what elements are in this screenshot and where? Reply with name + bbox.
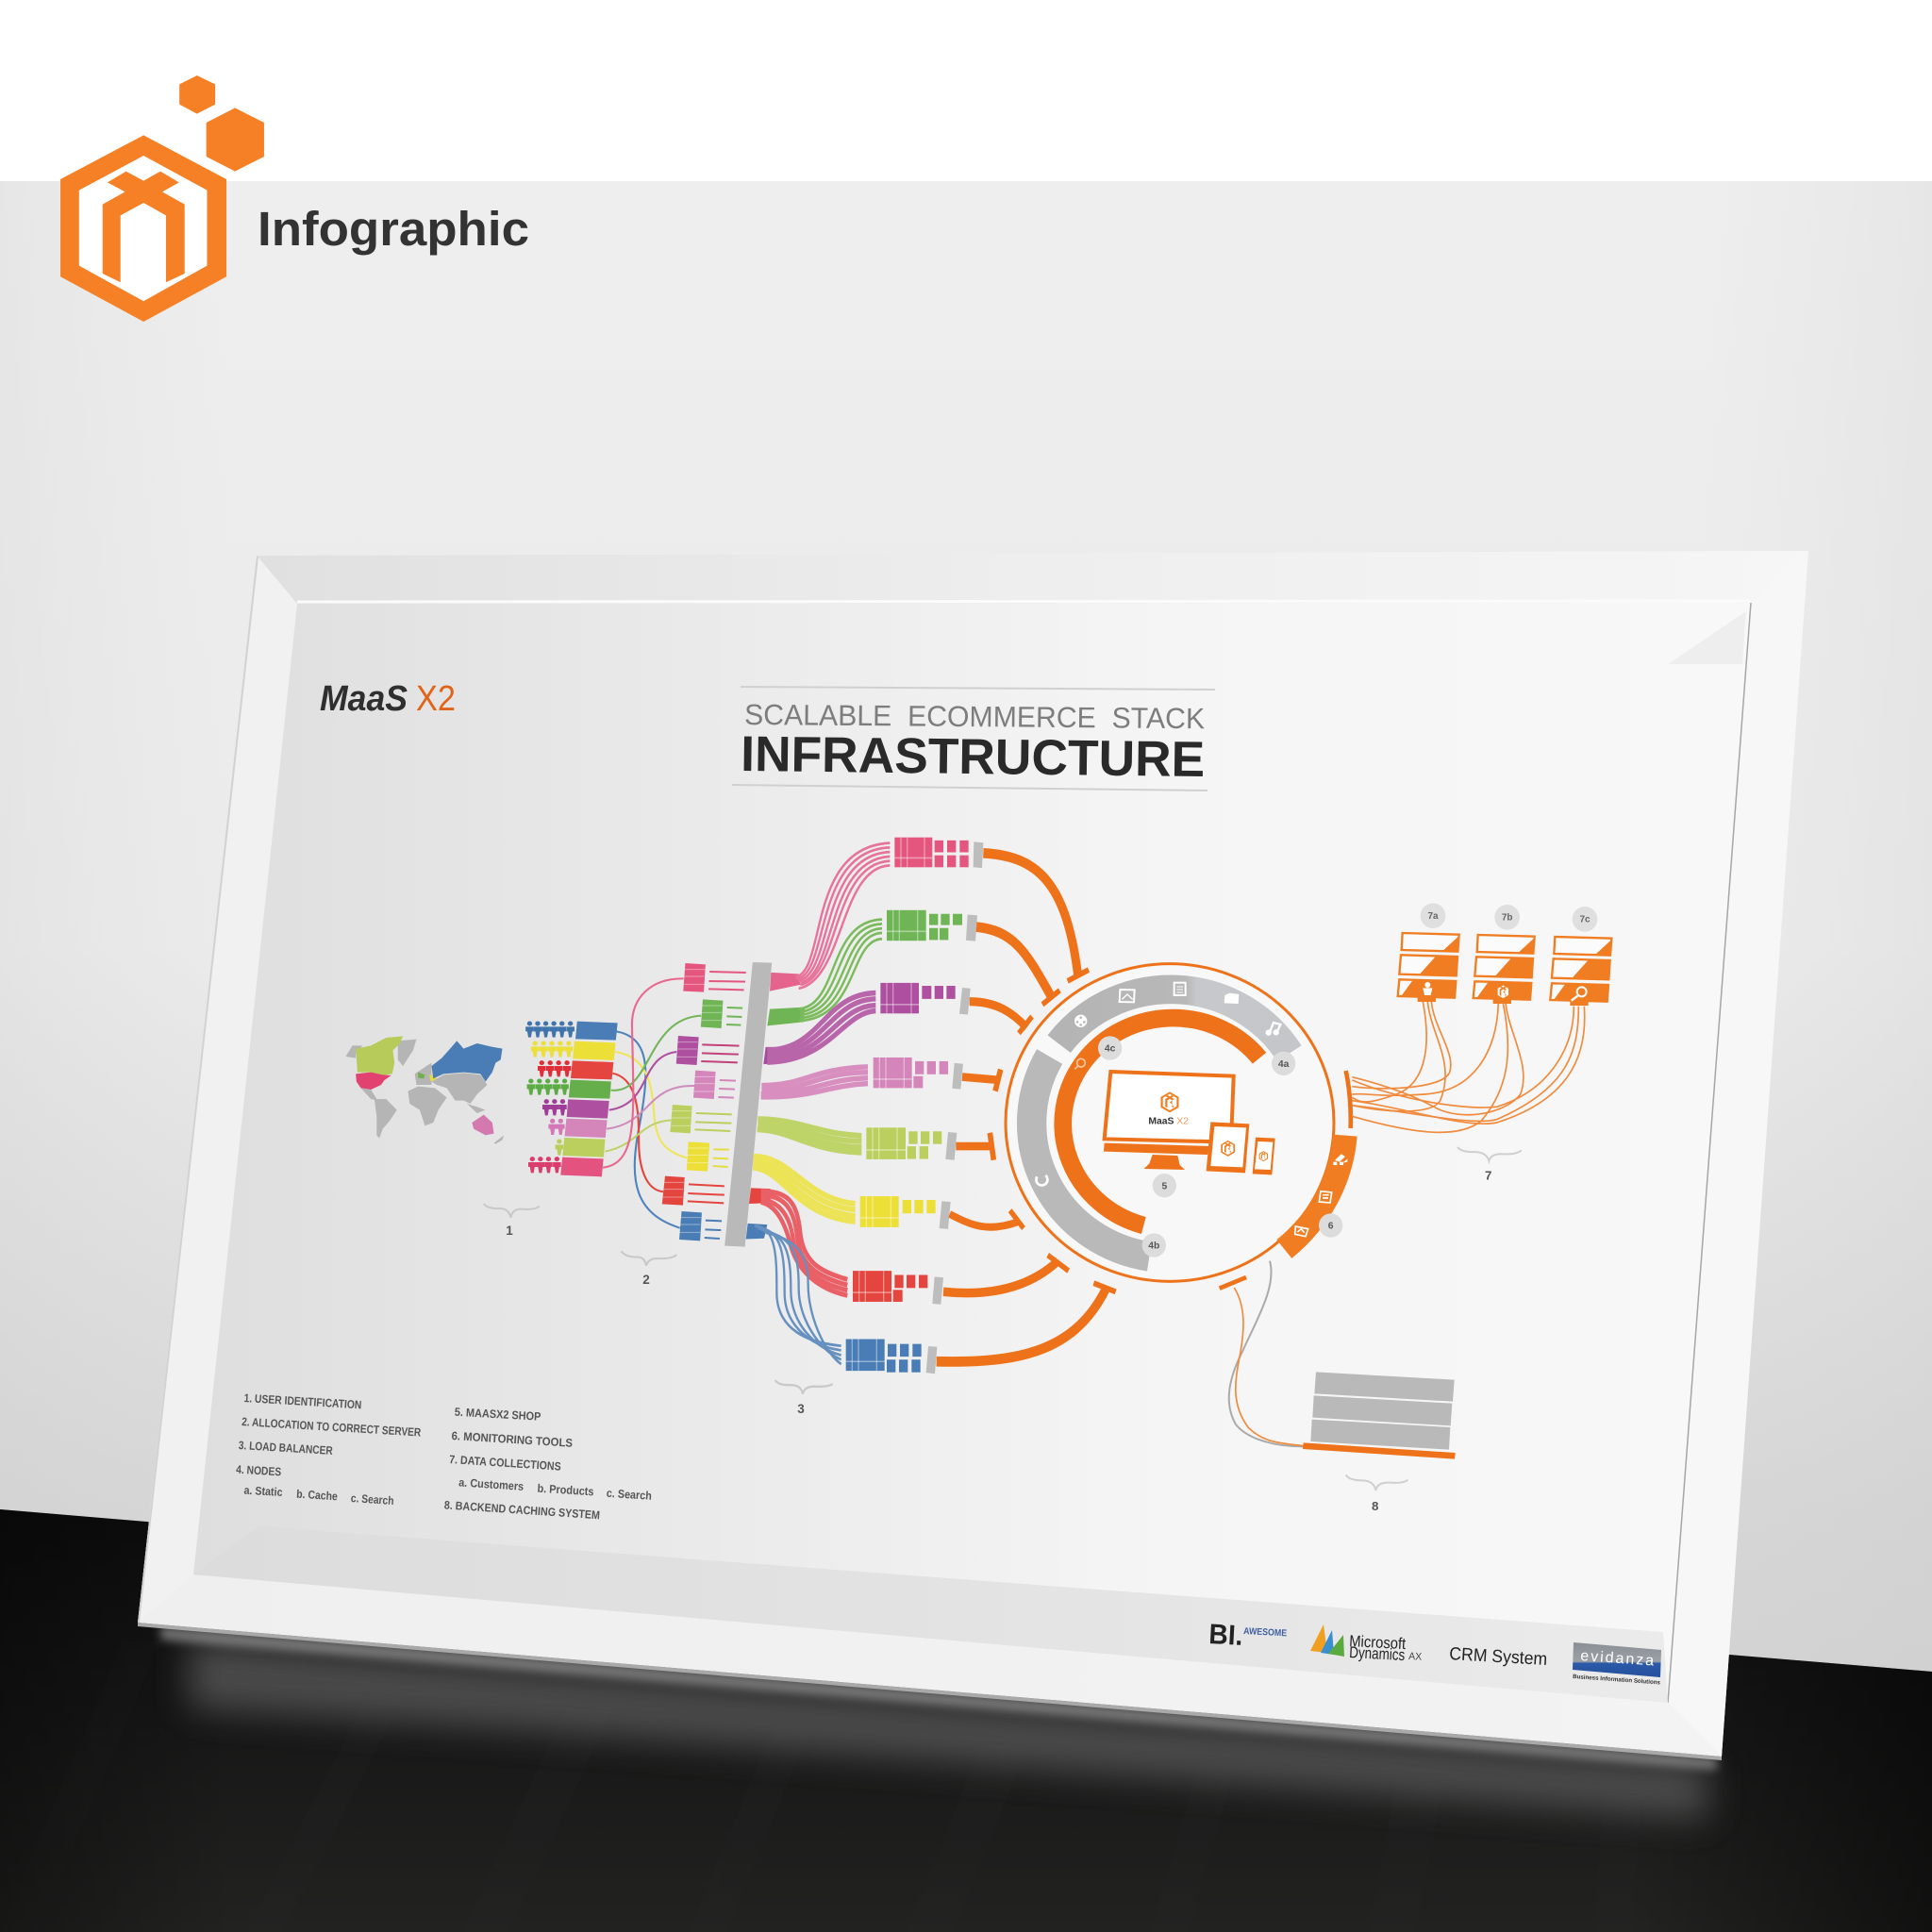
badge 5: 5 — [1161, 1181, 1167, 1191]
cache blocks — [1310, 1372, 1455, 1450]
legend: 6. MONITORING TOOLS — [451, 1429, 573, 1450]
icon: film — [1074, 1015, 1087, 1027]
footer logo: Microsoft Dynamics: Dynamics — [1349, 1643, 1406, 1664]
monitor logo — [1160, 1091, 1179, 1112]
brace 8 — [1346, 1474, 1407, 1491]
badge 6 — [1319, 1213, 1342, 1238]
badge 4a — [1272, 1052, 1295, 1075]
icon: refresh — [1036, 1175, 1047, 1186]
badge 7c — [1573, 907, 1597, 932]
footer logo: CRM System: CRM System — [1449, 1644, 1548, 1670]
icon: gift mark — [103, 172, 185, 282]
collection 7b — [1474, 935, 1535, 1004]
legend: 1. USER IDENTIFICATION — [243, 1391, 362, 1411]
step 7: data collections — [1346, 903, 1611, 1183]
legend: 2. ALLOCATION TO CORRECT SERVER — [242, 1415, 422, 1440]
flow: red — [749, 1188, 847, 1295]
collection wires — [1352, 1002, 1585, 1132]
badge 7a — [1421, 903, 1445, 928]
brace 1 — [484, 1204, 540, 1218]
connector: red — [853, 1271, 927, 1302]
badge 7b: 7b — [1502, 913, 1512, 924]
icon: sync — [1333, 1154, 1347, 1165]
number 1: 1 — [506, 1224, 513, 1238]
legend: c. Search — [606, 1487, 652, 1503]
poster frame — [138, 551, 1808, 1760]
legend: 8. BACKEND CACHING SYSTEM — [443, 1498, 600, 1522]
poster sheet — [193, 603, 1751, 1703]
grey cable — [1229, 1261, 1304, 1446]
number 8: 8 — [1372, 1499, 1378, 1513]
orange node links — [937, 853, 1116, 1361]
icon: large hexagon — [60, 135, 226, 322]
floor reflection glow — [160, 1626, 1717, 1819]
footer logo: Microsoft Dynamics — [1310, 1624, 1423, 1664]
connector: purple — [880, 983, 956, 1013]
icon: medium hexagon — [207, 108, 264, 172]
allocation servers — [662, 963, 723, 1241]
connector: blue — [846, 1340, 922, 1373]
badge 7a: 7a — [1427, 911, 1439, 922]
legend: a. Customers — [458, 1475, 525, 1493]
legend: b. Cache — [296, 1488, 338, 1503]
title — [732, 687, 1215, 791]
icon: magnifier — [1074, 1058, 1085, 1069]
icon: report — [1319, 1191, 1332, 1203]
badge 4b: 4b — [1148, 1241, 1159, 1252]
node ring 4a — [1059, 990, 1290, 1054]
footer logo: evidanza — [1573, 1642, 1661, 1687]
monitor wordmark: MaaS X2 — [1148, 1117, 1189, 1127]
floor — [0, 1509, 1932, 1932]
badge 6: 6 — [1328, 1222, 1334, 1232]
poster logo: MaaS — [320, 679, 408, 719]
phone — [1253, 1138, 1275, 1174]
legend: b. Products — [537, 1482, 594, 1498]
flow: purple — [763, 993, 875, 1064]
badge 4b — [1142, 1233, 1166, 1257]
footer logo: BI Awesome: BI. — [1208, 1619, 1243, 1652]
flow: magenta — [770, 843, 890, 991]
collection 7c — [1550, 937, 1611, 1006]
poster logo — [320, 679, 456, 719]
connector: pink — [874, 1058, 948, 1088]
brand logo — [60, 75, 264, 322]
icon: small hexagon — [179, 75, 215, 114]
main circle: shop and nodes — [1006, 964, 1347, 1281]
legend: 4. NODES — [236, 1463, 282, 1478]
connector: magenta — [894, 838, 969, 867]
user rows — [525, 1021, 575, 1173]
icon: chart — [1295, 1226, 1308, 1237]
load balancer bar — [724, 962, 772, 1247]
connector: yellow — [860, 1196, 936, 1227]
t-bar — [1346, 1071, 1351, 1128]
icon: music — [1267, 1023, 1280, 1035]
badge 7b — [1494, 905, 1520, 930]
bottom logo band — [193, 1526, 1668, 1703]
badge 4a: 4a — [1278, 1059, 1290, 1070]
wall background — [0, 181, 1932, 1709]
monitoring ring 6 — [1284, 1136, 1345, 1249]
orange cable — [1234, 1288, 1304, 1446]
footer logo: Microsoft Dynamics: AX — [1408, 1651, 1423, 1663]
title: INFRASTRUCTURE — [741, 726, 1206, 788]
collection 7a — [1398, 933, 1459, 1002]
brace 3 — [775, 1380, 833, 1394]
step 8: backend caching — [1220, 1261, 1456, 1513]
brace 2 — [622, 1251, 676, 1266]
number 2: 2 — [642, 1273, 650, 1287]
brace 7 — [1457, 1147, 1522, 1161]
monitor — [1104, 1072, 1234, 1170]
node ring 4b — [1032, 1057, 1149, 1257]
legend: 3. LOAD BALANCER — [238, 1439, 333, 1457]
legend: 7. DATA COLLECTIONS — [449, 1453, 561, 1474]
legend — [236, 1391, 652, 1522]
poster logo: X2 — [416, 679, 456, 719]
routing cables — [603, 978, 701, 1228]
white top band — [0, 0, 1932, 182]
flow: yellow — [753, 1157, 856, 1222]
connector: lime — [866, 1127, 941, 1159]
badge 7c: 7c — [1579, 915, 1591, 925]
flow: green — [767, 920, 882, 1025]
server output lines — [688, 972, 746, 1239]
legend: 5. MAASX2 SHOP — [454, 1406, 541, 1424]
icon: folder — [1224, 993, 1239, 1004]
step 3: flows, node connectors, orange links — [746, 838, 1116, 1394]
title: SCALABLE ECOMMERCE STACK — [744, 698, 1206, 735]
footer logo: evidanza: Business Information Solutions — [1573, 1674, 1660, 1687]
legend: c. Search — [350, 1491, 394, 1507]
user bars — [560, 1022, 618, 1176]
icon: image — [1120, 990, 1135, 1002]
legend: a. Static — [243, 1484, 283, 1499]
badge 5 — [1153, 1174, 1176, 1197]
badge 4c — [1098, 1036, 1122, 1060]
flow: lime — [758, 1119, 861, 1153]
node ring 4c — [1063, 1018, 1259, 1225]
number 3: 3 — [797, 1402, 805, 1416]
badge 4c: 4c — [1105, 1044, 1116, 1055]
world map — [345, 1036, 504, 1144]
flow: blue — [746, 1224, 841, 1364]
glass highlight — [1668, 611, 1746, 664]
step 1 and 2: users, map, cables, servers — [345, 962, 772, 1266]
circle outline — [1006, 964, 1334, 1281]
connector: green — [887, 910, 962, 941]
tablet — [1207, 1122, 1249, 1173]
icon: document — [1174, 983, 1186, 995]
footer logo: evidanza: evidanza — [1580, 1648, 1655, 1669]
footer logo: Microsoft Dynamics: Microsoft — [1349, 1632, 1407, 1653]
footer logo: BI Awesome: AWESOME — [1243, 1626, 1288, 1639]
footer logo: BI Awesome — [1208, 1619, 1288, 1652]
t-bar — [1220, 1277, 1246, 1289]
cache base — [1303, 1442, 1456, 1459]
brand heading: Infographic — [258, 202, 529, 256]
number 7: 7 — [1485, 1169, 1491, 1183]
flow: pink — [761, 1067, 868, 1097]
